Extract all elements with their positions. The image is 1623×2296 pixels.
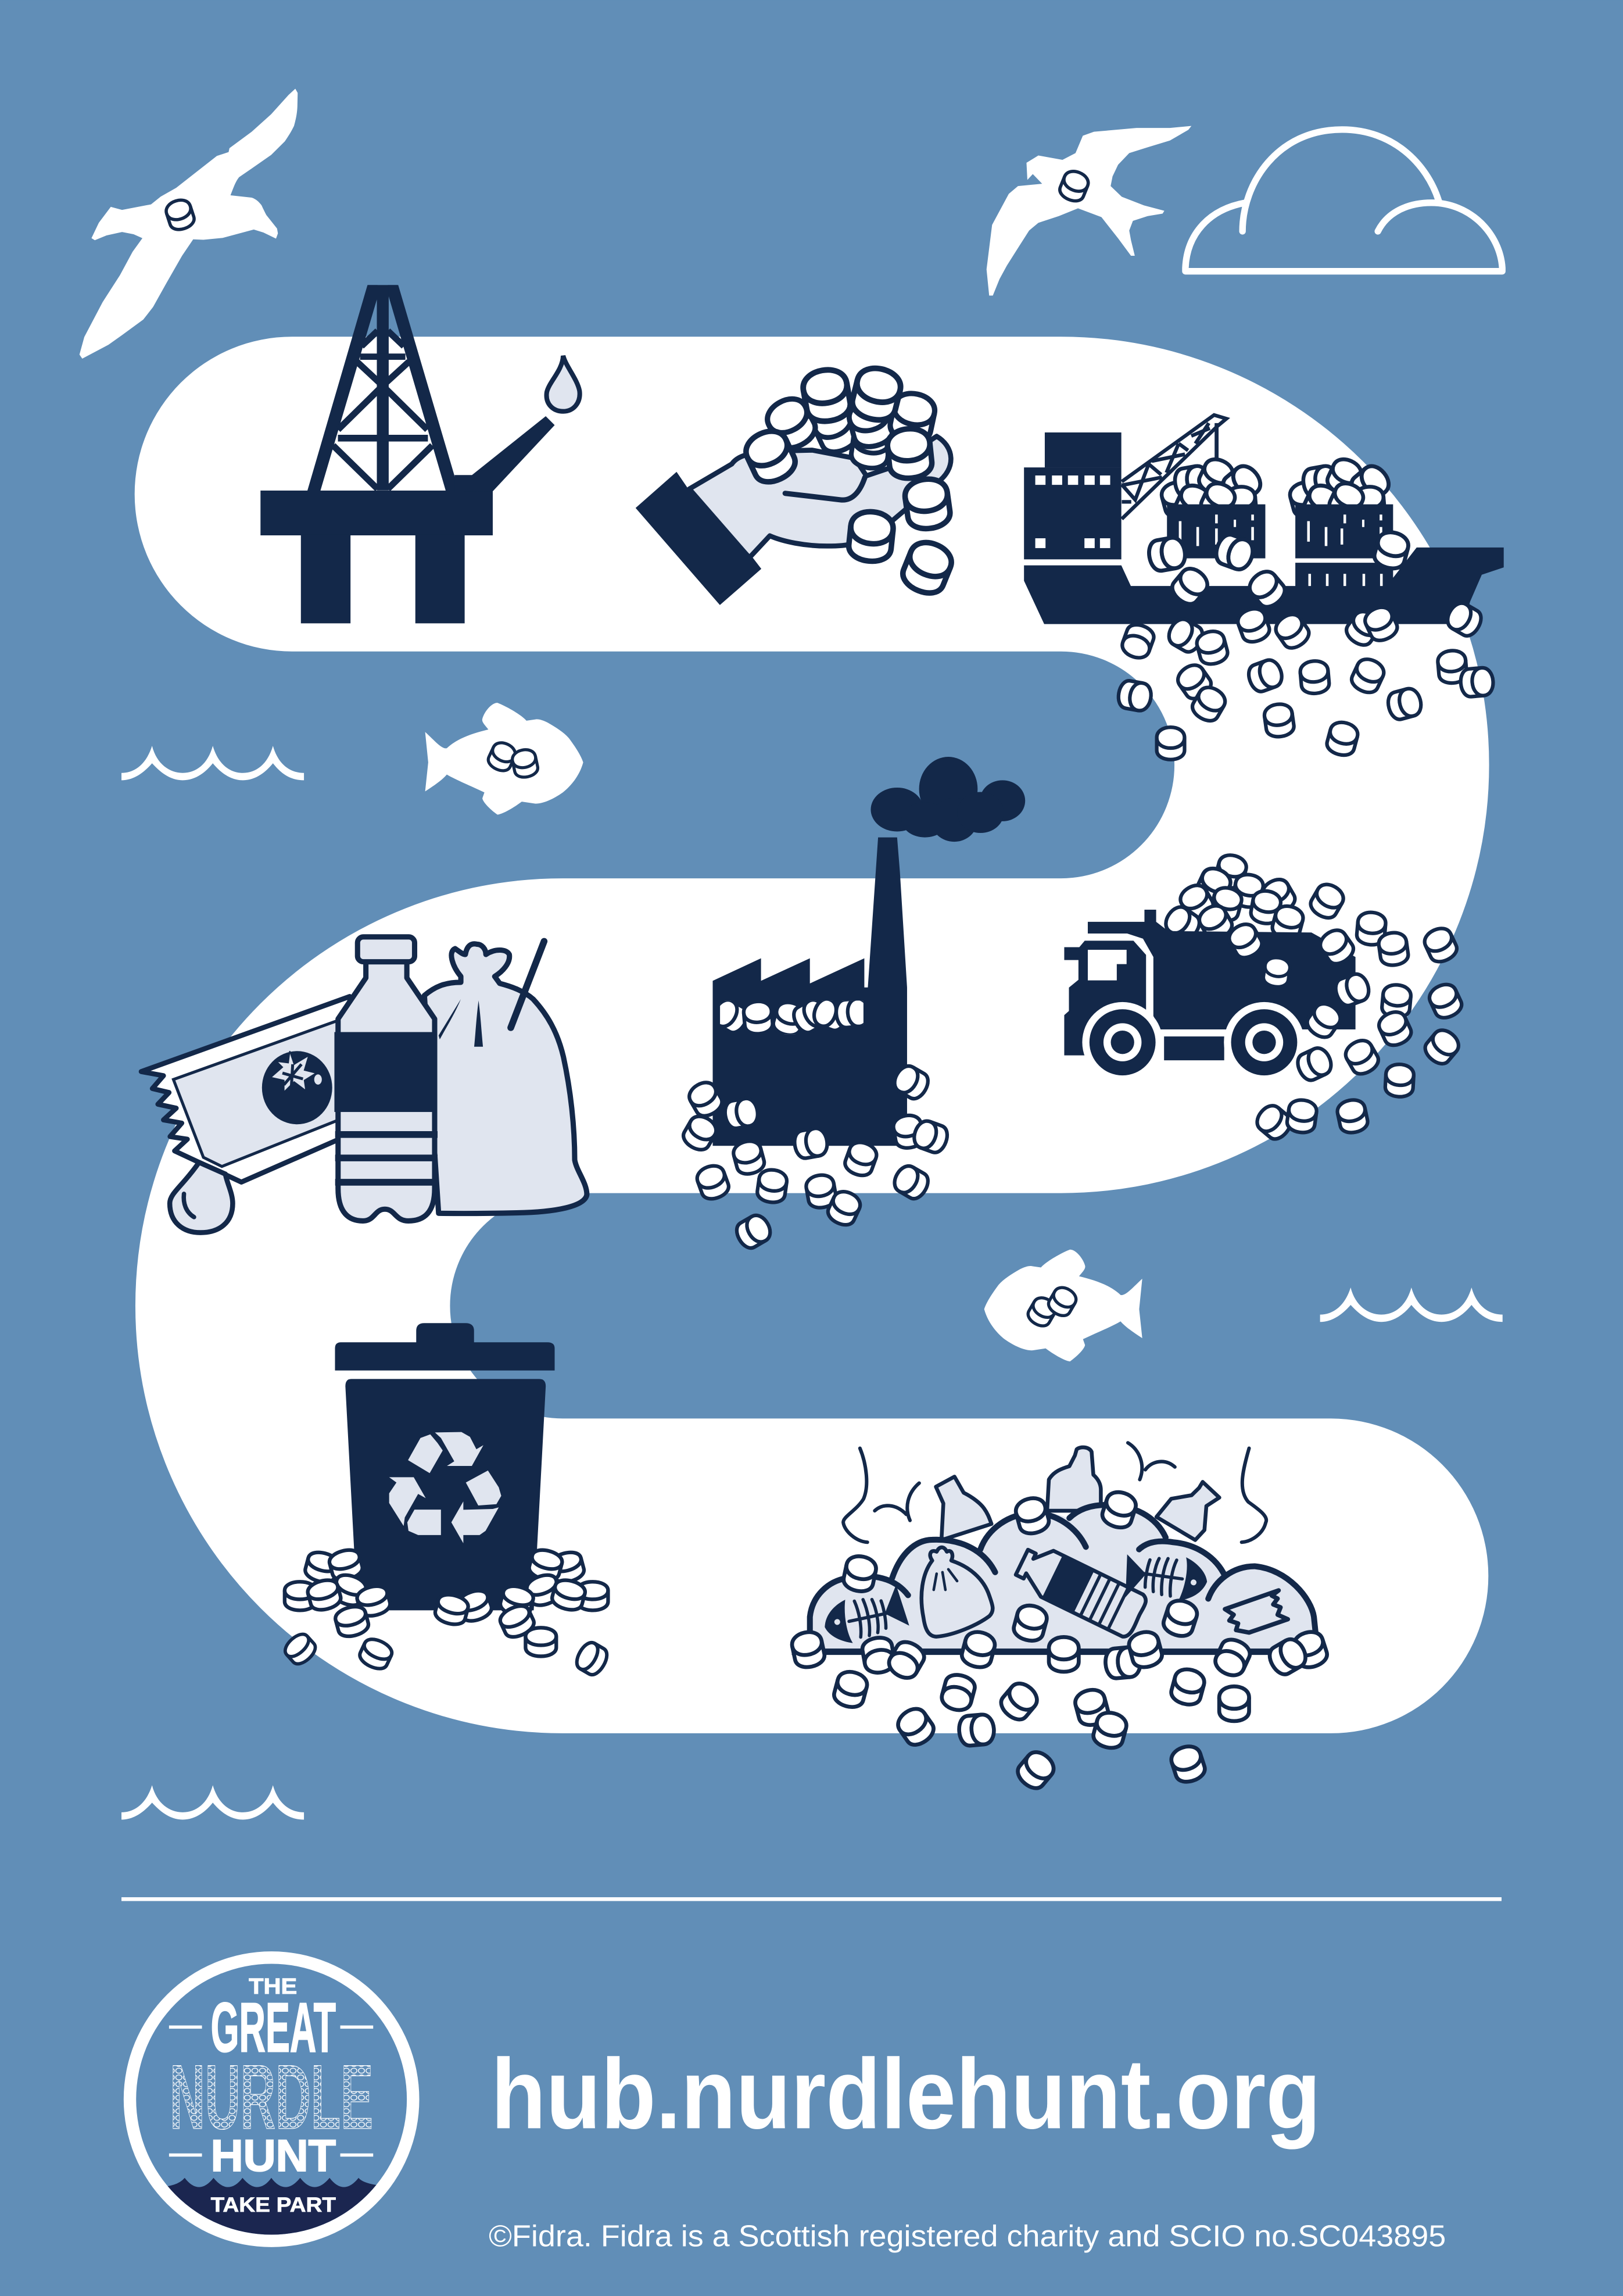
truck window [1088, 950, 1127, 981]
icon: factory [680, 838, 951, 1251]
stink lines [843, 1443, 1266, 1542]
heap bottle [1012, 1540, 1149, 1639]
icon: recycle symbol [389, 1432, 501, 1543]
ship crane [1122, 415, 1226, 519]
heap sachet [1225, 1590, 1288, 1633]
heap outlines [792, 1505, 1324, 1652]
winding white path [292, 494, 1332, 1576]
truck load nurdles [1161, 852, 1305, 944]
icon: sauce drop [170, 1163, 232, 1233]
icon: left wave [121, 746, 304, 780]
icon: rubbish heap [790, 1443, 1330, 1793]
logo text: TAKE PART: TAKE PART [211, 2194, 336, 2216]
heap fish bones [820, 1584, 911, 1647]
spilled nurdles [1116, 529, 1494, 760]
background bottles [936, 1447, 1219, 1540]
logo text: GREAT: GREAT [211, 1989, 336, 2067]
icon: bin bag [424, 941, 587, 1214]
website url: hub.nurdlehunt.org [491, 2038, 1321, 2150]
icon: hand holding nurdles [636, 364, 956, 605]
logo sea [167, 2177, 377, 2234]
heap mounds [809, 1505, 1316, 1651]
logo: The Great Nurdle Hunt [124, 1951, 420, 2254]
ship windows and container slits [1036, 475, 1382, 586]
logo text: NURDLE: NURDLE [170, 2047, 373, 2148]
divider [121, 1897, 1502, 1901]
logo text: HUNT: HUNT [211, 2131, 336, 2181]
icon: bottom wave [121, 1785, 304, 1819]
nurdles around factory [680, 1062, 951, 1251]
cargo nurdle piles [1159, 455, 1394, 527]
icon: oil drop [547, 356, 580, 412]
icon: smoke cloud [870, 757, 1025, 842]
icon: plastic products group [141, 937, 587, 1233]
ship superstructure [1024, 432, 1504, 624]
icon: truck with nurdles [1064, 852, 1465, 1143]
factory window nurdles [720, 1000, 864, 1035]
copyright line: ©Fidra. Fidra is a Scottish registered charity and SCIO no.SC043895 [489, 2219, 1446, 2253]
nurdles around bin [281, 1547, 611, 1678]
truck body [1064, 910, 1356, 1060]
icon: albatross with nurdle [80, 89, 298, 359]
icon: cargo ship with spilling nurdles [1024, 415, 1504, 760]
icon: recycling bin [281, 1323, 611, 1678]
icon: right wave [1320, 1288, 1503, 1322]
icon: cloud outline [1185, 130, 1502, 271]
icon: fish with nurdles, upper [425, 703, 583, 815]
icon: oil rig [260, 285, 580, 623]
heap bag [922, 1547, 993, 1637]
logo rules [169, 2026, 373, 2156]
icon: tomato [262, 1051, 332, 1124]
icon: sachet [141, 996, 350, 1182]
truck wheels [1082, 1002, 1305, 1082]
icon: swallow with nurdle [987, 126, 1191, 295]
logo text: THE: THE [249, 1974, 297, 1999]
nurdles falling from truck [1226, 880, 1465, 1143]
heap nurdles [790, 1489, 1330, 1793]
icon: fish with nurdles, lower [984, 1250, 1142, 1361]
icon: plastic bottle [334, 937, 438, 1221]
